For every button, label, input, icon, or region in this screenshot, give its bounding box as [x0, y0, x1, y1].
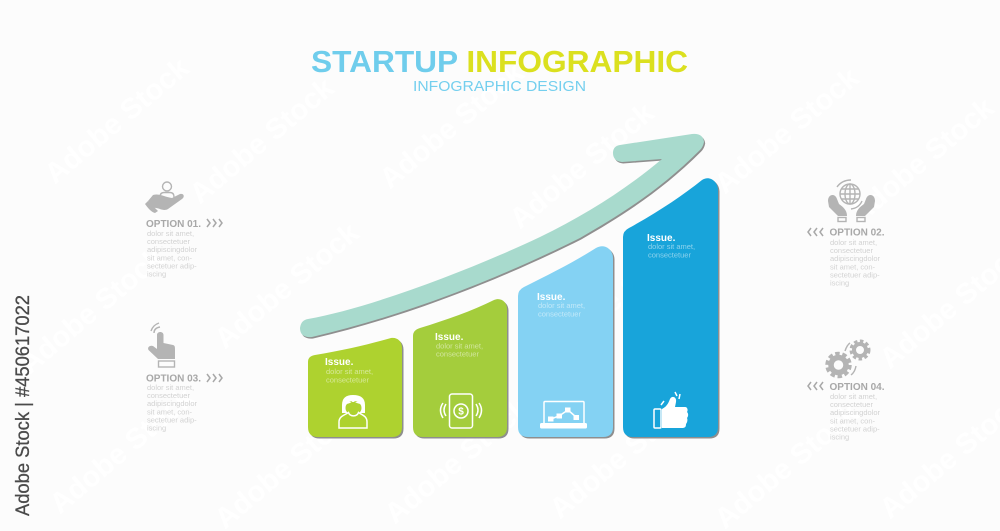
stock id label: Adobe Stock | #450617022: [13, 295, 34, 516]
panel: option 02: [808, 180, 885, 288]
bar 2 text: dolor sit amet,: [436, 342, 483, 350]
panel: option 04: [808, 341, 885, 442]
option 02 text: iscing: [830, 278, 849, 288]
bar 4 text: dolor sit amet,: [648, 242, 695, 251]
chevrons right: [207, 219, 222, 227]
growth arrow: [300, 134, 705, 339]
option 02 text: consectetuer: [830, 246, 873, 255]
icon: thumbs up: [654, 392, 688, 428]
option 04 text: sit amet, con-: [830, 416, 876, 425]
bar 2: [413, 299, 508, 438]
bar 1: [308, 338, 404, 438]
option 02 heading: OPTION 02.: [830, 228, 885, 238]
chevrons left: [808, 228, 823, 236]
bar 4 text: [647, 233, 695, 260]
subtitle: INFOGRAPHIC DESIGN: [413, 78, 586, 95]
option 01 text: sectetuer adip-: [147, 261, 197, 270]
text: Adobe Stock: [374, 56, 531, 195]
text: Adobe Stock: [39, 51, 196, 190]
bar 3 text: dolor sit amet,: [538, 301, 585, 310]
bar 4 text: consectetuer: [648, 250, 691, 260]
option 01 text: iscing: [147, 270, 166, 278]
option 03 text: sectetuer adip-: [147, 415, 197, 424]
option 01 text: consectetuer: [147, 237, 190, 246]
text: Adobe Stock: [184, 71, 341, 210]
option 03 text: consectetuer: [147, 391, 190, 400]
panel: option 03: [146, 323, 222, 432]
text: Adobe Stock: [504, 96, 661, 235]
bar 1 text: Issue.: [325, 357, 354, 368]
panel: option 01: [145, 182, 222, 278]
text: Adobe Stock: [44, 381, 201, 520]
option 04 text: iscing: [830, 432, 849, 442]
option 02 text: sectetuer adip-: [830, 270, 880, 279]
option 02 text: sit amet, con-: [830, 262, 876, 271]
icon: finger tap: [148, 323, 175, 367]
option 04 text: dolor sit amet,: [830, 392, 877, 401]
option 02 text: adipiscingdolor: [830, 254, 881, 263]
icon: phone with dollar: $: [458, 406, 464, 418]
bar 3 text: [537, 292, 585, 318]
option 04 heading: OPTION 04.: [830, 382, 885, 393]
bar 1 text: consectetuer: [326, 376, 369, 384]
option 01 heading: OPTION 01.: [146, 219, 201, 230]
bar 2 text: Issue.: [435, 332, 464, 343]
chevrons left: [808, 382, 823, 390]
bar 4: [623, 178, 720, 438]
icon: laptop with chart: [540, 402, 587, 428]
option 04 text: adipiscingdolor: [830, 408, 881, 417]
option 04 text: sectetuer adip-: [830, 424, 880, 433]
chevrons right: [207, 374, 222, 382]
icon: gears: [827, 341, 869, 376]
option 03 text: sit amet, con-: [147, 407, 193, 416]
option 02 text: dolor sit amet,: [830, 238, 877, 247]
bar 1 text: dolor sit amet,: [326, 367, 373, 376]
icon: hands holding globe: [828, 180, 875, 222]
option 01 text: dolor sit amet,: [147, 229, 194, 238]
bar 3 text: consectetuer: [538, 310, 581, 318]
bar 3: [518, 246, 614, 438]
text: Adobe Stock: [209, 216, 366, 355]
bar 3 text: Issue.: [537, 292, 566, 303]
title: STARTUP INFOGRAPHIC: [311, 44, 688, 79]
text: Adobe Stock: [844, 91, 1000, 230]
bar 4 text: Issue.: [647, 233, 676, 244]
option 04 text: consectetuer: [830, 400, 873, 409]
text: Adobe Stock: [379, 391, 536, 530]
text: Adobe Stock: [539, 228, 696, 367]
text: Adobe Stock: [544, 386, 701, 525]
icon: woman: [339, 395, 367, 428]
bar 1 text: [325, 357, 373, 384]
option 01 text: adipiscingdolor: [147, 245, 198, 254]
option 03 text: iscing: [147, 424, 166, 432]
option 03 text: adipiscingdolor: [147, 399, 198, 408]
text: Adobe Stock: [14, 241, 171, 380]
option 01 text: sit amet, con-: [147, 253, 193, 262]
bar 2 text: consectetuer: [436, 350, 479, 358]
icon: hand holding person: [145, 182, 184, 213]
option 03 heading: OPTION 03.: [146, 374, 201, 384]
option 03 text: dolor sit amet,: [147, 383, 194, 392]
bar 2 text: [435, 332, 483, 358]
text: Adobe Stock: [709, 61, 866, 200]
